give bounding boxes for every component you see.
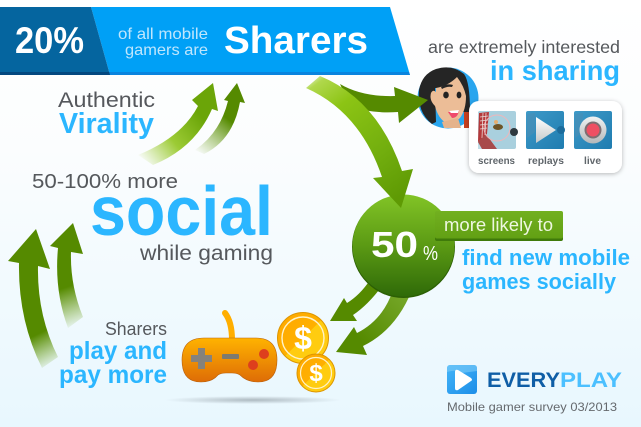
- arrow: up left large: [8, 229, 58, 368]
- circle: 50%: [352, 194, 455, 298]
- arrow: to avatar: [340, 84, 428, 123]
- text: sharers play and pay more: Sharers: [105, 319, 167, 339]
- banner: gamers are: [125, 42, 208, 59]
- banner: [0, 7, 410, 75]
- icon: gamepad: [182, 313, 277, 382]
- banner: Sharers: [224, 20, 368, 62]
- text: authentic virality: Virality: [59, 108, 154, 140]
- text: social while gaming: 50-100% more: [32, 171, 178, 193]
- icon: small coin: [297, 354, 335, 392]
- text: sharers play and pay more: play and: [69, 337, 167, 365]
- tag: more likely to: more likely to: [444, 215, 553, 235]
- text: are extremely interested in sharing: in sharing: [490, 55, 620, 86]
- arrow: circle to coins small: [330, 280, 382, 321]
- icon: small coin: $: [309, 360, 323, 387]
- text: social while gaming: [32, 171, 273, 265]
- logo: everyplay: [447, 365, 622, 394]
- text: social while gaming: while gaming: [139, 242, 273, 265]
- thumbnail: screens: [478, 111, 518, 149]
- panel: sharing options: live: [584, 156, 601, 167]
- text: social while gaming: social: [90, 172, 273, 250]
- icon: large coin: $: [294, 320, 312, 356]
- circle: 50%: %: [423, 243, 438, 265]
- icon: large coin: [278, 312, 328, 364]
- panel: sharing options: screens: [478, 156, 515, 167]
- arrow: up left small: [50, 223, 83, 328]
- tag: more likely to: [435, 211, 563, 241]
- thumbnail: replays: [526, 111, 565, 149]
- logo: everyplay: EVERY: [487, 369, 560, 392]
- text: are extremely interested in sharing: [428, 37, 620, 86]
- text: authentic virality: [58, 89, 155, 140]
- banner: 20%: [15, 20, 84, 61]
- text: find new mobile games socially: games socially: [462, 269, 617, 294]
- text: sharers play and pay more: pay more: [59, 361, 167, 389]
- text: are extremely interested in sharing: are extremely interested: [428, 37, 620, 57]
- panel: sharing options: [469, 101, 622, 173]
- arrow: circle to coins large: [336, 290, 412, 355]
- arrow: up right small: [195, 83, 245, 154]
- text: authentic virality: Authentic: [58, 89, 155, 112]
- panel: sharing options: replays: [528, 156, 564, 167]
- thumbnail: live: [574, 111, 612, 149]
- shadow under gamepad: [165, 396, 341, 404]
- banner: of all mobile: [118, 26, 208, 43]
- circle: 50%: 50: [371, 224, 418, 265]
- text: sharers play and pay more: [59, 319, 167, 389]
- text: find new mobile games socially: find new mobile: [462, 245, 630, 270]
- logo: everyplay: PLAY: [560, 369, 622, 392]
- icon: avatar: [418, 67, 478, 128]
- arrow: down to 50% circle: [306, 76, 413, 208]
- text: survey source: Mobile gamer survey 03/2013: [447, 400, 617, 414]
- text: find new mobile games socially: [462, 245, 630, 294]
- arrow: up right large: [138, 83, 218, 165]
